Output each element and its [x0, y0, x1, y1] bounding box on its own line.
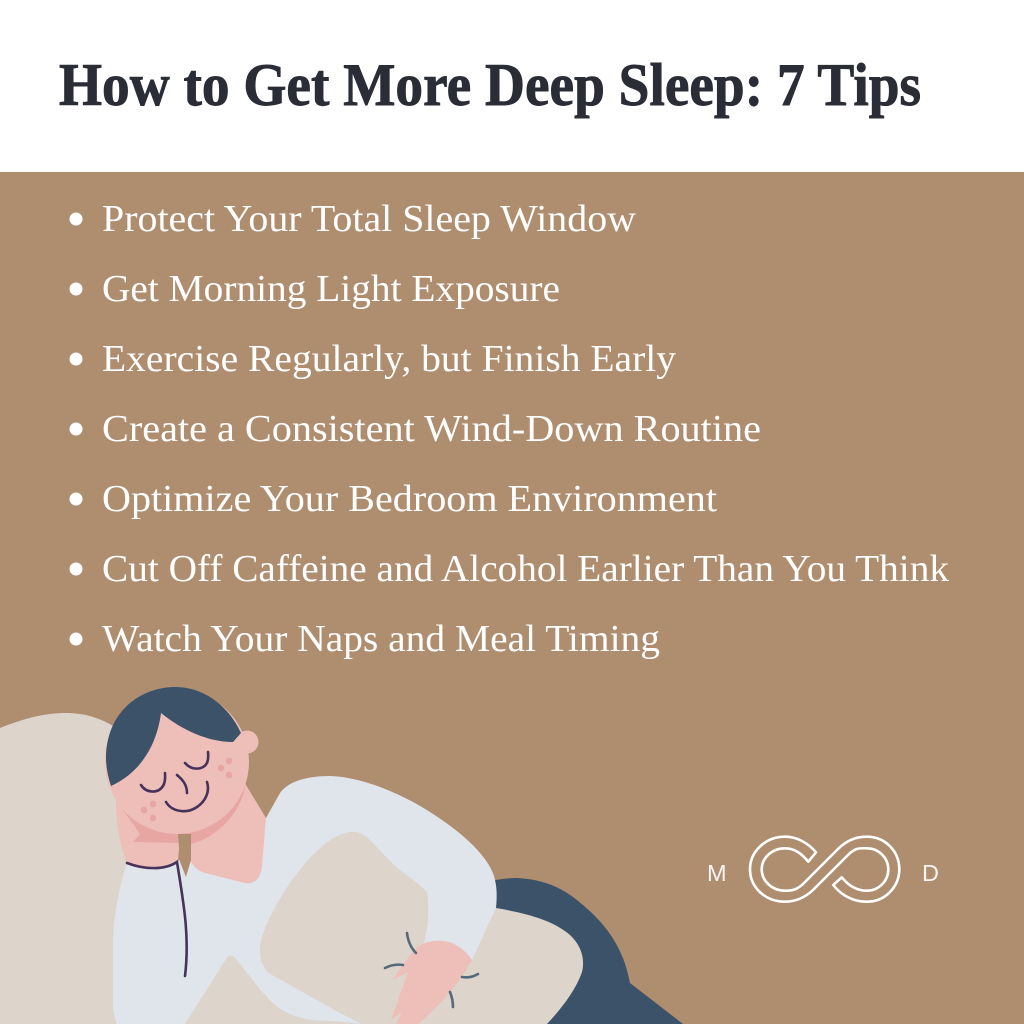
hair [106, 687, 241, 786]
logo [707, 837, 939, 902]
tip 7: Watch Your Naps and Meal Timing [102, 618, 660, 660]
sleeve seam [127, 862, 187, 976]
freckles [141, 758, 232, 821]
gap between hand and neck [178, 834, 191, 877]
neck [178, 780, 266, 883]
shirt [113, 776, 497, 1024]
hugging hand [391, 941, 472, 1024]
blanket [480, 878, 683, 1024]
logo letter M: M [707, 860, 727, 886]
face [105, 690, 249, 834]
ear [236, 730, 258, 754]
supporting hand [116, 800, 180, 867]
neck shadow [123, 787, 245, 844]
tip 4: Create a Consistent Wind-Down Routine [102, 408, 761, 450]
tip 2: Get Morning Light Exposure [102, 268, 560, 310]
hand motion marks [385, 933, 478, 1007]
tip 3: Exercise Regularly, but Finish Early [102, 338, 676, 380]
tip 5: Optimize Your Bedroom Environment [102, 478, 717, 520]
tip 1: Protect Your Total Sleep Window [102, 198, 637, 240]
head pillow [0, 713, 140, 1024]
facial features [141, 752, 208, 811]
hugged pillow [170, 815, 583, 1024]
tip 6: Cut Off Caffeine and Alcohol Earlier Than You Think [102, 548, 949, 590]
illustration: sleeping person [0, 687, 683, 1024]
tips list [70, 198, 949, 660]
infinity mark [750, 837, 899, 902]
title: How to Get More Deep Sleep: 7 Tips [59, 52, 921, 118]
logo letter D: D [922, 860, 939, 886]
